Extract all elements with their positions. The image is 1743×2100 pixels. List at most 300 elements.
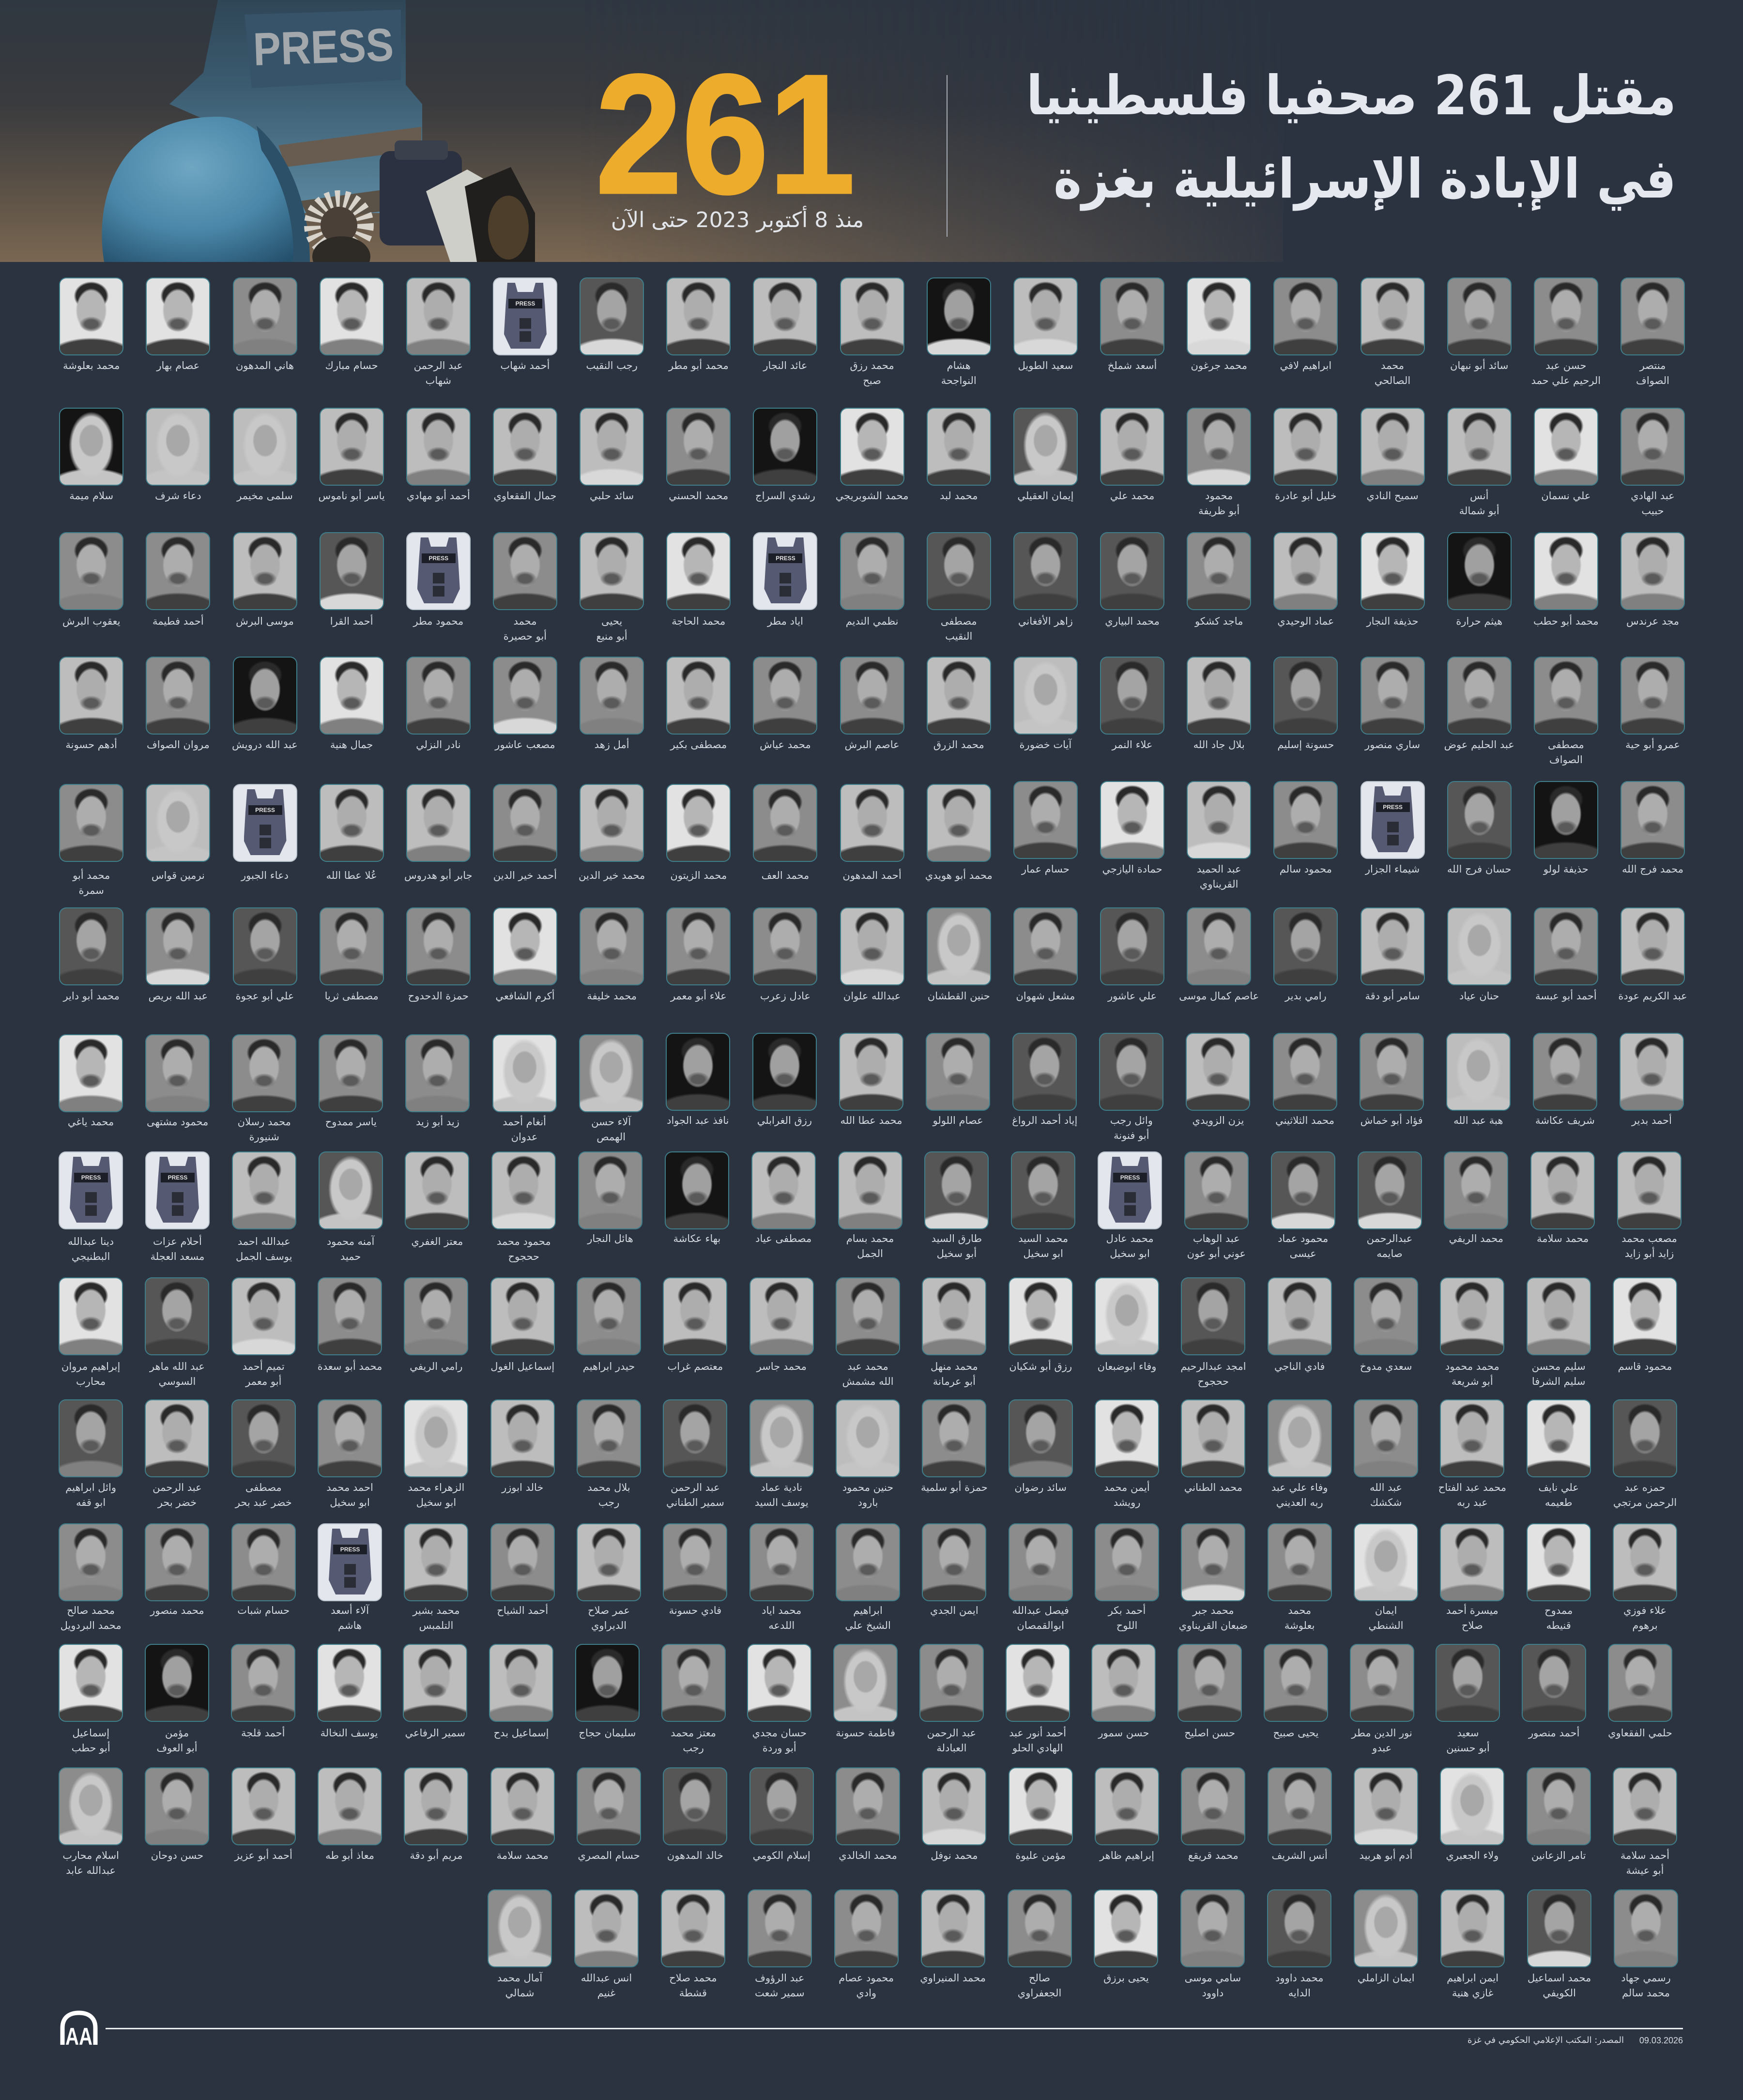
text: محمد بسام <box>846 1233 894 1244</box>
portrait card <box>1100 532 1164 610</box>
text: حسن سمور <box>1098 1727 1149 1739</box>
portrait card <box>404 1399 468 1477</box>
text: ايمن الجدي <box>930 1605 979 1616</box>
text: أمل زهد <box>595 739 629 751</box>
text: حسام المصري <box>578 1850 640 1861</box>
text: رجب النقيب <box>586 360 638 371</box>
text: عبد الرحمن <box>414 360 463 371</box>
portrait card <box>838 1151 902 1229</box>
text: عبد الرؤوف <box>755 1972 805 1984</box>
main title <box>1026 64 1676 211</box>
text: أبو عرمانة <box>933 1376 976 1387</box>
portrait card <box>1013 781 1078 859</box>
portrait card <box>1534 781 1598 859</box>
portrait card <box>1361 532 1425 610</box>
text: رامي الريفي <box>410 1361 463 1372</box>
portrait card <box>1447 408 1512 486</box>
portrait card <box>1440 1889 1505 1967</box>
text: الصواف <box>1636 375 1669 386</box>
text: شهاب <box>426 375 451 386</box>
text: سائد حلبي <box>590 490 634 502</box>
text: مصطفى <box>941 615 977 627</box>
text: أحمد الشياح <box>497 1605 548 1616</box>
portrait card <box>406 277 471 355</box>
text: عبد ربه <box>1457 1497 1488 1508</box>
text: يحيى <box>601 615 622 627</box>
text: رسمي جهاد <box>1621 1972 1671 1984</box>
portrait card <box>753 277 817 355</box>
portrait card <box>1447 277 1512 355</box>
portrait card <box>405 1151 469 1229</box>
text: محمد عياش <box>760 739 811 751</box>
text: عصام اللولو <box>933 1115 983 1126</box>
text: هاني المدهون <box>236 360 294 371</box>
text: عبد الرحمن <box>671 1482 720 1493</box>
text: سعيد الطويل <box>1018 360 1073 371</box>
text: مصطفى ثريا <box>325 990 379 1002</box>
portrait card <box>493 408 557 486</box>
text: محمد الزيتون <box>670 870 727 881</box>
text: اياد مطر <box>767 615 803 627</box>
text: حسام مبارك <box>325 360 378 371</box>
text: عبد الحميد <box>1197 863 1241 875</box>
text: الجمل <box>857 1248 883 1259</box>
portrait card <box>59 1523 123 1601</box>
portrait card <box>1009 1399 1073 1477</box>
text: سليم الشرفا <box>1532 1376 1585 1387</box>
text: محمد داوود <box>1275 1972 1324 1984</box>
portrait card <box>1527 1277 1591 1355</box>
portrait card <box>59 784 123 862</box>
portrait card <box>146 784 210 862</box>
header illustration: press vest, helmet and camera on sand: PRESS <box>252 19 395 76</box>
text: محمد جاسر <box>757 1361 807 1372</box>
portrait card <box>1273 657 1338 735</box>
text: محمد فرج الله <box>1622 863 1683 875</box>
text: أيمن محمد <box>1104 1482 1150 1493</box>
portrait card: PRESS <box>255 807 275 813</box>
text: علاء النمر <box>1112 739 1153 751</box>
text: أبو منيع <box>596 630 627 642</box>
portrait card <box>1354 1277 1418 1355</box>
text: أبو حطب <box>72 1742 110 1754</box>
portrait card <box>320 408 384 486</box>
portrait card <box>146 907 210 985</box>
portrait card <box>1100 657 1164 735</box>
portrait card <box>1613 1523 1677 1601</box>
portrait card <box>663 1767 727 1845</box>
text: وائل رجب <box>1110 1115 1153 1126</box>
text: عبد الرحمن <box>927 1727 976 1739</box>
text: هشام <box>947 360 971 371</box>
portrait card <box>320 277 384 355</box>
text: خضر عبد بحر <box>235 1497 292 1508</box>
text: إياد أحمد الرواغ <box>1012 1115 1077 1126</box>
text: سامر أبو دقة <box>1365 990 1420 1002</box>
portrait card <box>577 1277 641 1355</box>
text: خالد ابوزر <box>502 1482 543 1493</box>
text: ابو قفه <box>76 1497 106 1508</box>
portrait card <box>145 1151 210 1229</box>
text: اللدعه <box>768 1620 795 1631</box>
portrait card <box>840 408 904 486</box>
portrait card <box>231 1277 296 1355</box>
text: محمد منصور <box>150 1605 204 1616</box>
text: محمود مشتهى <box>147 1116 208 1128</box>
portrait card <box>232 1034 296 1112</box>
portrait card <box>577 1523 641 1601</box>
text: هاشم <box>338 1620 362 1631</box>
text: الرحيم علي حمد <box>1531 375 1601 386</box>
portrait card <box>1100 408 1164 486</box>
portrait card <box>1181 1767 1245 1845</box>
portrait card <box>59 657 123 735</box>
text: محمد صلاح <box>669 1972 717 1984</box>
portrait card <box>666 1033 730 1111</box>
text: يحيى برزق <box>1103 1972 1149 1984</box>
portrait card <box>1534 907 1598 985</box>
portrait card <box>145 1034 210 1112</box>
text: تامر الزعانين <box>1531 1850 1586 1861</box>
portrait card <box>405 1034 470 1112</box>
portrait card <box>663 1277 727 1355</box>
portrait card <box>753 532 817 610</box>
portrait card <box>1613 1767 1677 1845</box>
portrait card <box>1273 277 1338 355</box>
main title: مقتل 261 صحفيا فلسطينيا <box>1026 64 1676 127</box>
portrait card <box>666 657 731 735</box>
portrait card <box>748 1889 812 1967</box>
text: إسلام الكومي <box>753 1850 810 1861</box>
text: محمد ياغي <box>68 1116 114 1128</box>
text: ابو سخيل <box>1110 1248 1150 1259</box>
text: جمال هنية <box>330 739 373 751</box>
text: مشعل شهوان <box>1016 990 1075 1002</box>
portrait card <box>926 1033 990 1111</box>
portrait card <box>59 408 123 486</box>
text: الرحمن مرتجي <box>1613 1497 1677 1508</box>
portrait card: PRESS <box>1120 1174 1140 1181</box>
portrait card <box>490 1399 555 1477</box>
portrait card <box>1181 1523 1245 1601</box>
text: نظمي النديم <box>846 615 899 627</box>
portrait card <box>580 907 644 985</box>
portrait card <box>666 784 731 862</box>
text: هائل النجار <box>587 1233 633 1244</box>
text: زاهر الأفغاني <box>1018 615 1073 627</box>
text: أحمد سلامة <box>1621 1850 1669 1861</box>
text: بهاء عكاشة <box>673 1233 720 1244</box>
portrait card <box>661 1889 725 1967</box>
portrait card <box>1534 277 1598 355</box>
text: حسن عبد <box>1545 360 1586 371</box>
text: حسان فرج الله <box>1447 863 1511 875</box>
text: عصام بهار <box>156 360 199 371</box>
text: آلاء حسن <box>591 1116 631 1128</box>
text: مصطفى عياد <box>755 1233 811 1244</box>
portrait card <box>1534 408 1598 486</box>
text: مريم أبو دقة <box>410 1850 463 1861</box>
text: النواجحة <box>941 375 977 386</box>
text: ياسر أبو ناموس <box>319 490 385 502</box>
portrait card: PRESS <box>776 555 795 562</box>
text: أحمد قلجة <box>241 1727 285 1739</box>
text: علي نايف <box>1538 1482 1579 1493</box>
text: وادي <box>856 1987 876 1999</box>
portrait card <box>1621 277 1685 355</box>
text: الزهراء محمد <box>408 1482 464 1493</box>
portrait card <box>319 1034 383 1112</box>
portrait card <box>318 1277 382 1355</box>
text: سمير الرفاعي <box>405 1727 465 1739</box>
text: ماجد كشكو <box>1195 615 1243 627</box>
row 10 <box>59 1399 1677 1477</box>
portrait card <box>665 1151 729 1229</box>
text: ضبعان القريناوي <box>1179 1620 1248 1631</box>
text: سمير شعت <box>755 1987 805 1999</box>
text: محمد لبد <box>940 490 978 502</box>
portrait card <box>922 1767 986 1845</box>
text: معتز محمد <box>671 1727 716 1739</box>
text: محمد اياد <box>762 1605 801 1616</box>
portrait card <box>232 907 297 985</box>
text: آمال محمد <box>497 1972 542 1984</box>
portrait card <box>1447 781 1512 859</box>
logo: AA <box>58 2009 102 2048</box>
row 4 <box>59 657 1685 766</box>
portrait card <box>232 277 297 355</box>
text: عبدالله احمد <box>238 1236 290 1247</box>
text: محمد خير الدين <box>579 870 645 881</box>
portrait card <box>1354 1767 1418 1845</box>
portrait card <box>1361 907 1425 985</box>
text: عبدالله علوان <box>843 990 901 1002</box>
text: محمد رسلان <box>238 1116 291 1128</box>
portrait card <box>580 277 644 355</box>
text: عبد الله <box>1370 1482 1402 1493</box>
portrait card <box>59 277 123 355</box>
portrait card <box>491 1151 556 1229</box>
text: أحلام عزات <box>153 1236 202 1247</box>
text: محمد أبو <box>73 870 110 881</box>
text: حمزه عبد <box>1624 1482 1666 1493</box>
portrait card <box>574 1889 639 1967</box>
text: مصعب محمد <box>1621 1233 1677 1244</box>
text: حميد <box>340 1251 361 1262</box>
portrait card <box>231 1399 296 1477</box>
portrait card <box>666 532 731 610</box>
portrait card <box>1440 1399 1504 1477</box>
text: مصطفى <box>1548 739 1584 751</box>
portrait card <box>1358 1151 1422 1229</box>
text: سليمان حجاج <box>579 1727 636 1739</box>
text: عبد الله بريص <box>148 990 208 1002</box>
portrait card <box>145 1523 209 1601</box>
text: شيماء الجزار <box>1365 863 1420 875</box>
portrait card <box>492 1034 557 1112</box>
portrait card <box>1273 1033 1337 1111</box>
text: محمد الطناني <box>1184 1482 1242 1493</box>
text: وفاء علي عبد <box>1271 1482 1328 1493</box>
portrait card <box>1011 1151 1075 1229</box>
portrait card <box>1013 277 1078 355</box>
portrait card <box>1440 1523 1504 1601</box>
text: دعاء شرف <box>155 490 201 502</box>
text: أحمد بكر <box>1108 1605 1146 1616</box>
text: سمير الطناني <box>666 1497 724 1508</box>
text: محمد منهل <box>931 1361 978 1372</box>
row 1 <box>59 277 1685 386</box>
text: ايمن ابراهيم <box>1447 1972 1498 1984</box>
portrait card <box>580 657 644 735</box>
text: داوود <box>1202 1987 1223 1999</box>
portrait card <box>753 907 817 985</box>
row 3 <box>59 532 1685 642</box>
portrait card <box>231 1523 296 1601</box>
text: محمود عماد <box>1278 1233 1328 1244</box>
text: محمد <box>1288 1605 1311 1616</box>
portrait card <box>749 1277 814 1355</box>
portrait card <box>406 657 471 735</box>
portrait card <box>1527 1523 1591 1601</box>
text: طعيمه <box>1545 1497 1572 1508</box>
portrait card <box>232 657 297 735</box>
portrait card <box>403 1644 467 1722</box>
text: إسماعيل الغول <box>490 1361 554 1372</box>
portrait card <box>145 1767 209 1845</box>
text: محمود مطر <box>413 615 463 627</box>
portrait card <box>1360 1033 1424 1111</box>
text: الشنطي <box>1368 1620 1404 1631</box>
portrait card <box>318 1767 382 1845</box>
text: محمد الشوبريجي <box>836 490 908 502</box>
portrait card <box>1613 1399 1677 1477</box>
portrait card <box>1013 532 1078 610</box>
portrait card <box>1186 1033 1250 1111</box>
text: مصعب عاشور <box>495 739 555 751</box>
row 11 <box>59 1523 1677 1601</box>
text: برهوم <box>1632 1620 1658 1631</box>
text: محمد سالم <box>1622 1987 1670 1999</box>
text: حذيفة لولو <box>1544 863 1589 875</box>
text: يعقوب البرش <box>62 615 121 627</box>
text: علاء أبو معمر <box>671 990 727 1002</box>
portrait card <box>1534 657 1598 735</box>
text: محمد الحسني <box>669 490 728 502</box>
text: طارق السيد <box>932 1233 982 1244</box>
portrait card <box>661 1644 726 1722</box>
text: مؤمن عليوة <box>1015 1850 1066 1861</box>
portrait card <box>1620 1033 1684 1111</box>
text: محمد بشير <box>413 1605 459 1616</box>
portrait card <box>840 657 904 735</box>
text: محمد <box>1381 360 1404 371</box>
text: محمد البياري <box>1105 615 1160 627</box>
portrait card <box>1009 1523 1073 1601</box>
text: فادي حسونة <box>669 1605 721 1616</box>
portrait card: PRESS <box>516 300 535 307</box>
portrait card <box>1098 1151 1162 1229</box>
portrait card <box>1013 657 1078 735</box>
text: أبو شريعة <box>1452 1376 1493 1387</box>
portrait card <box>1350 1644 1414 1722</box>
portrait card <box>493 532 557 610</box>
portrait card <box>320 784 384 862</box>
text: ابو سخيل <box>416 1497 456 1508</box>
text: التلمبس <box>419 1620 453 1631</box>
text: ساري منصور <box>1365 739 1420 751</box>
text: دينا عبدالله <box>68 1236 114 1247</box>
row 13 <box>59 1767 1677 1845</box>
portrait card <box>924 1151 989 1229</box>
text: بعلوشة <box>1284 1620 1315 1631</box>
text: عبد الرحمن <box>153 1482 202 1493</box>
portrait card <box>1617 1151 1682 1229</box>
text: رويشد <box>1114 1497 1140 1508</box>
text: شنيورة <box>249 1131 279 1143</box>
text: زيد أبو زيد <box>416 1116 459 1128</box>
portrait card <box>840 532 904 610</box>
portrait card <box>493 277 557 355</box>
portrait card <box>927 277 991 355</box>
portrait card <box>836 1767 900 1845</box>
text: نرمين قواس <box>152 870 205 881</box>
portrait card <box>1187 277 1251 355</box>
portrait card <box>1444 1151 1508 1229</box>
portrait card <box>59 1277 123 1355</box>
text: عاصم كمال موسى <box>1179 990 1259 1002</box>
text: السوسي <box>158 1376 196 1387</box>
text: إسماعيل بدح <box>494 1727 549 1739</box>
portrait card <box>839 1033 903 1111</box>
row 7 <box>59 1033 1684 1112</box>
text: أحمد خير الدين <box>493 870 557 881</box>
portrait card <box>1614 1889 1678 1967</box>
text: محمود <box>1205 490 1233 502</box>
text: مروان الصواف <box>147 739 210 751</box>
text: إسماعيل <box>72 1727 109 1739</box>
text: أحمد القرا <box>330 615 373 627</box>
portrait card <box>1273 907 1338 985</box>
portrait card <box>834 1889 899 1967</box>
portrait card <box>752 1033 817 1111</box>
text: محمد <box>513 615 536 627</box>
portrait card <box>1621 657 1685 735</box>
portrait card <box>1527 1767 1591 1845</box>
text: احمد محمد <box>326 1482 373 1493</box>
footer source: المصدر: المكتب الإعلامي الحكومي في غزة <box>1468 2035 1624 2045</box>
portrait card <box>749 1767 814 1845</box>
text: حمزة الدحدوح <box>408 990 469 1002</box>
portrait card <box>232 1151 296 1229</box>
text: شمالي <box>505 1987 535 1999</box>
text: إيمان العقيلي <box>1017 490 1073 502</box>
text: الهادي الحلو <box>1012 1742 1063 1754</box>
text: محمد السيد <box>1018 1233 1068 1244</box>
text: سعدي مدوخ <box>1360 1361 1412 1372</box>
text: بلال محمد <box>587 1482 630 1493</box>
text: محمد الريفي <box>1449 1233 1503 1244</box>
text: مسعد العجلة <box>150 1251 204 1262</box>
text: محمد الحاجة <box>672 615 725 627</box>
text: سلام ميمة <box>69 490 113 502</box>
portrait card <box>927 784 991 862</box>
portrait card <box>145 1277 209 1355</box>
text: النقيب <box>945 630 972 642</box>
portrait card <box>146 657 210 735</box>
text: يوسف السيد <box>755 1497 809 1508</box>
portrait card <box>1268 1767 1332 1845</box>
